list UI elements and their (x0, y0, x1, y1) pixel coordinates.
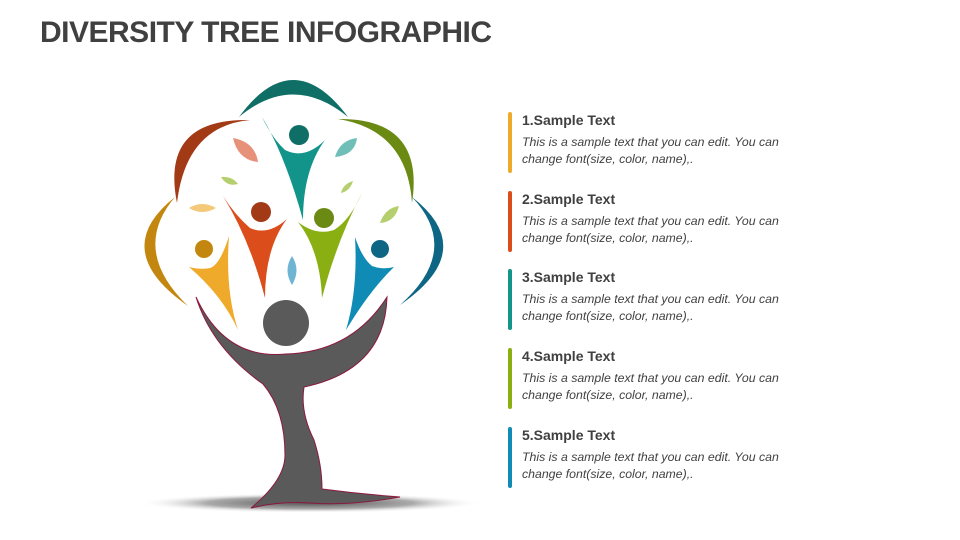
person: yellow (189, 236, 238, 330)
crescent: dark blue (400, 197, 443, 305)
trunk (196, 297, 400, 508)
person: blue (346, 237, 394, 330)
crescent: gold (144, 197, 188, 306)
crescent: top teal (239, 80, 348, 117)
item 2: This is a sample text that you can edit. You can (522, 214, 779, 228)
item 5: 5.Sample Text (522, 427, 615, 443)
item 4: This is a sample text that you can edit. You can (522, 371, 779, 385)
item 1: 1.Sample Text (522, 112, 615, 128)
person: teal (262, 117, 325, 220)
person: orange (223, 196, 287, 298)
item 4: 4.Sample Text (522, 348, 615, 364)
item 3: change font(size, color, name),. (522, 309, 694, 323)
person: green (298, 193, 362, 298)
item 1 (508, 112, 779, 173)
item 4: change font(size, color, name),. (522, 388, 694, 402)
item 2: 2.Sample Text (522, 191, 615, 207)
item 5 (508, 427, 779, 488)
leaves (189, 138, 399, 285)
title: DIVERSITY TREE INFOGRAPHIC (40, 16, 492, 49)
item 5: change font(size, color, name),. (522, 467, 694, 481)
item 3 (508, 269, 779, 330)
item 4 (508, 348, 779, 409)
item 3: 3.Sample Text (522, 269, 615, 285)
item 2 (508, 191, 779, 252)
item 3: This is a sample text that you can edit. You can (522, 292, 779, 306)
item 1: change font(size, color, name),. (522, 152, 694, 166)
crescent: olive (338, 119, 414, 203)
item 5: This is a sample text that you can edit. You can (522, 450, 779, 464)
item 2: change font(size, color, name),. (522, 231, 694, 245)
crescent: red-brown (174, 120, 250, 203)
shadow (138, 493, 482, 513)
item 1: This is a sample text that you can edit. You can (522, 135, 779, 149)
